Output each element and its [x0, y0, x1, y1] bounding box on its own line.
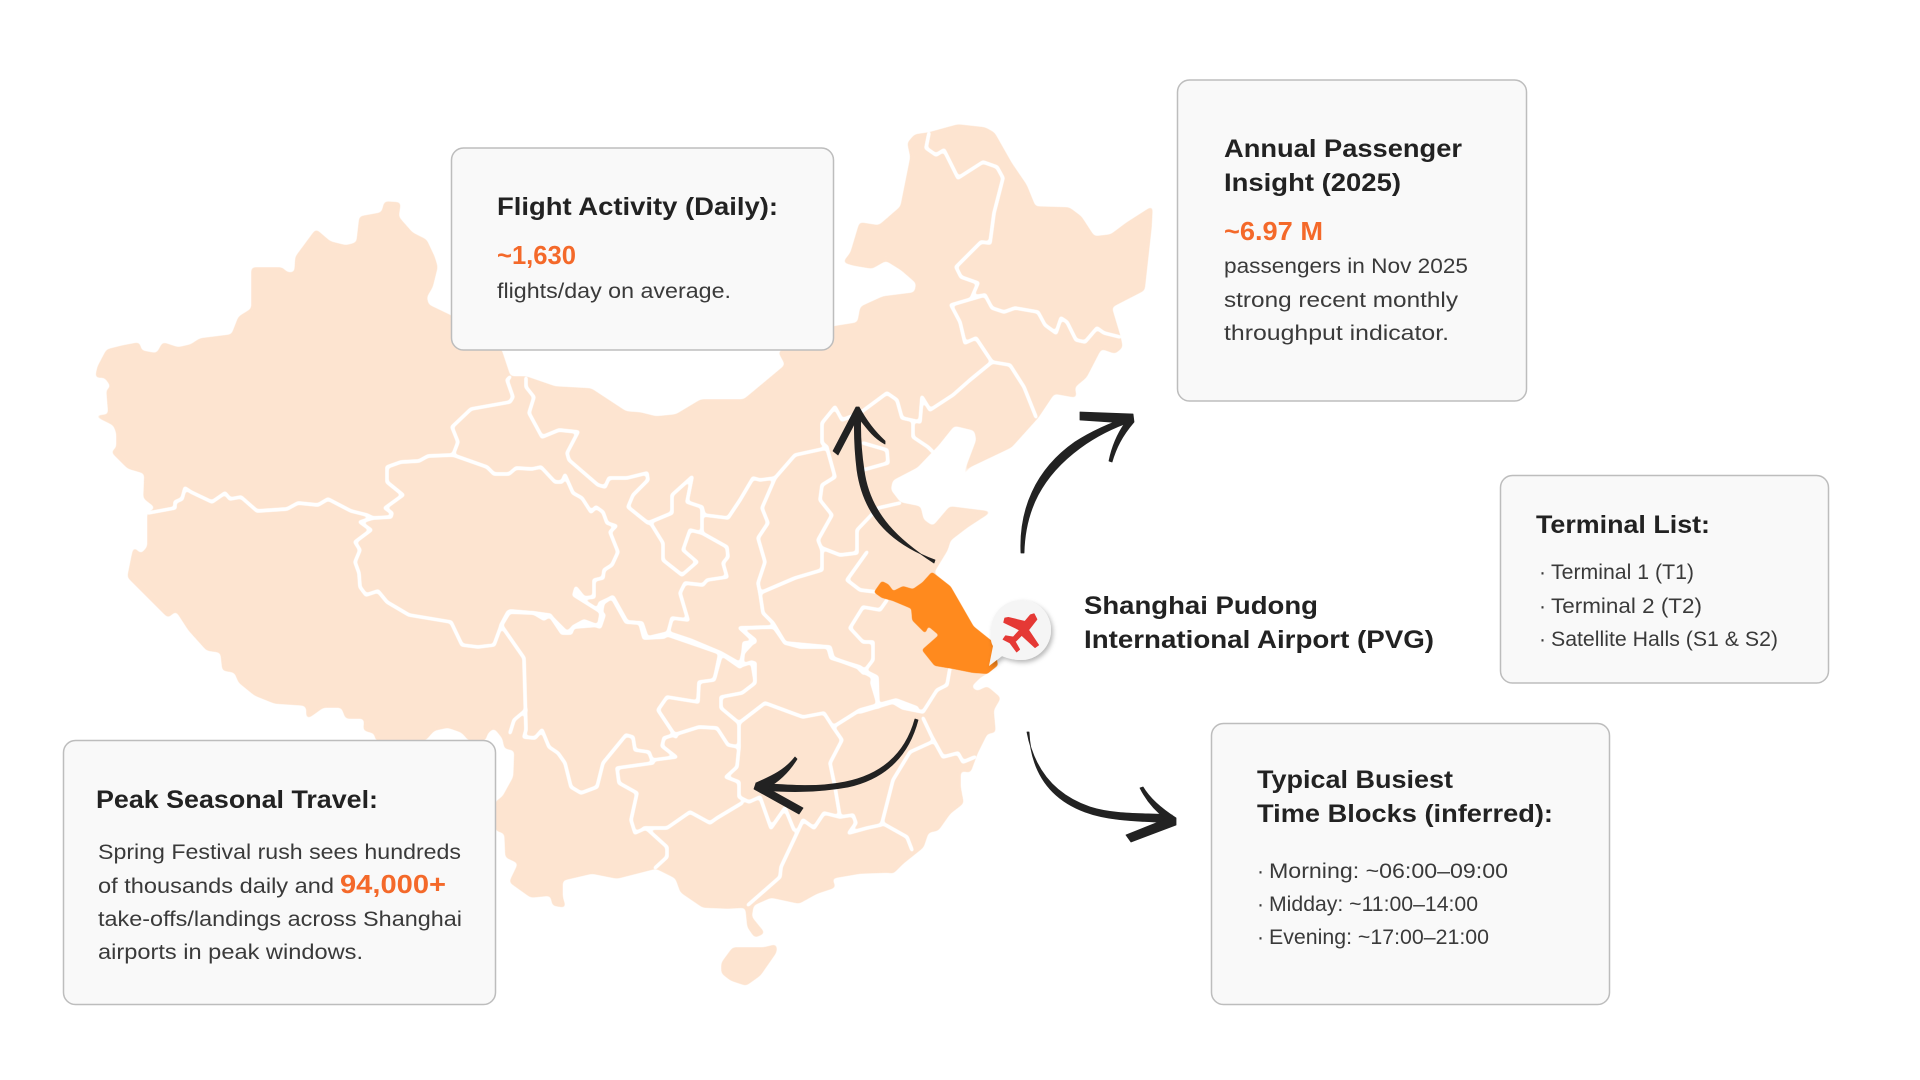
- busiest time items: ·: [1257, 893, 1264, 916]
- busiest time items: Evening: ~17:00–21:00: [1269, 926, 1489, 949]
- flight activity heading: Flight Activity (Daily):: [497, 193, 778, 221]
- panel: flight activity: [452, 148, 834, 350]
- annual passenger description: strong recent monthly: [1224, 289, 1459, 312]
- terminal items: Terminal 2 (T2): [1551, 595, 1702, 618]
- panel: peak seasonal travel: [64, 740, 496, 1004]
- busiest time items: Morning: ~06:00–09:00: [1269, 860, 1508, 883]
- terminal items: ·: [1539, 561, 1546, 584]
- annual passenger description: [1224, 255, 1468, 345]
- map: province borders: [148, 133, 1120, 905]
- annual passenger description: passengers in Nov 2025: [1224, 255, 1468, 278]
- annual passenger heading: [1224, 135, 1462, 197]
- terminal items: Satellite Halls (S1 & S2): [1551, 628, 1778, 651]
- peak seasonal description: airports in peak windows.: [98, 941, 363, 964]
- flight activity description: flights/day on average.: [497, 280, 731, 303]
- peak seasonal heading: Peak Seasonal Travel:: [96, 786, 378, 814]
- annual passenger heading: Insight (2025): [1224, 169, 1401, 197]
- flight count: ~1,630: [497, 240, 576, 270]
- peak seasonal description: of thousands daily and: [98, 875, 334, 898]
- busiest time heading: Typical Busiest: [1257, 766, 1454, 794]
- peak seasonal description: 94,000+: [340, 869, 446, 899]
- terminal list heading: Terminal List:: [1536, 511, 1710, 539]
- terminal items: ·: [1539, 595, 1546, 618]
- icon: airplane: [1003, 614, 1038, 652]
- busiest time heading: [1257, 766, 1553, 828]
- busiest time items: Midday: ~11:00–14:00: [1269, 893, 1478, 916]
- passenger count: ~6.97 M: [1224, 216, 1323, 246]
- arrow: to flight activity: [833, 407, 935, 563]
- busiest time items: [1257, 860, 1508, 949]
- icon: airport map pin: [989, 600, 1051, 666]
- panel: annual passenger insight: [1178, 80, 1526, 401]
- map: Hainan island: [722, 945, 776, 985]
- terminal items: ·: [1539, 628, 1546, 651]
- arrow: to annual passenger insight: [1021, 412, 1134, 553]
- busiest time items: ·: [1257, 860, 1264, 883]
- airport name label: [1084, 592, 1434, 654]
- busiest time heading: Time Blocks (inferred):: [1257, 800, 1553, 828]
- panel: typical busiest time blocks: [1212, 724, 1610, 1004]
- busiest time items: ·: [1257, 926, 1264, 949]
- airport name label: Shanghai Pudong: [1084, 592, 1318, 620]
- panel: terminal list: [1500, 476, 1828, 683]
- map of China: [96, 125, 1152, 985]
- annual passenger description: throughput indicator.: [1224, 322, 1449, 345]
- map land outline: [96, 125, 1152, 937]
- terminal items: Terminal 1 (T1): [1551, 561, 1694, 584]
- arrow: to peak seasonal travel: [754, 719, 918, 814]
- peak seasonal description: take-offs/landings across Shanghai: [98, 908, 462, 931]
- peak seasonal description: [98, 841, 462, 964]
- map: highlighted Jiangsu province: [875, 573, 997, 673]
- annual passenger heading: Annual Passenger: [1224, 135, 1462, 163]
- airport name label: International Airport (PVG): [1084, 626, 1434, 654]
- terminal items: [1539, 561, 1778, 651]
- arrow: to typical busiest time blocks: [1027, 732, 1176, 842]
- peak seasonal description: Spring Festival rush sees hundreds: [98, 841, 461, 864]
